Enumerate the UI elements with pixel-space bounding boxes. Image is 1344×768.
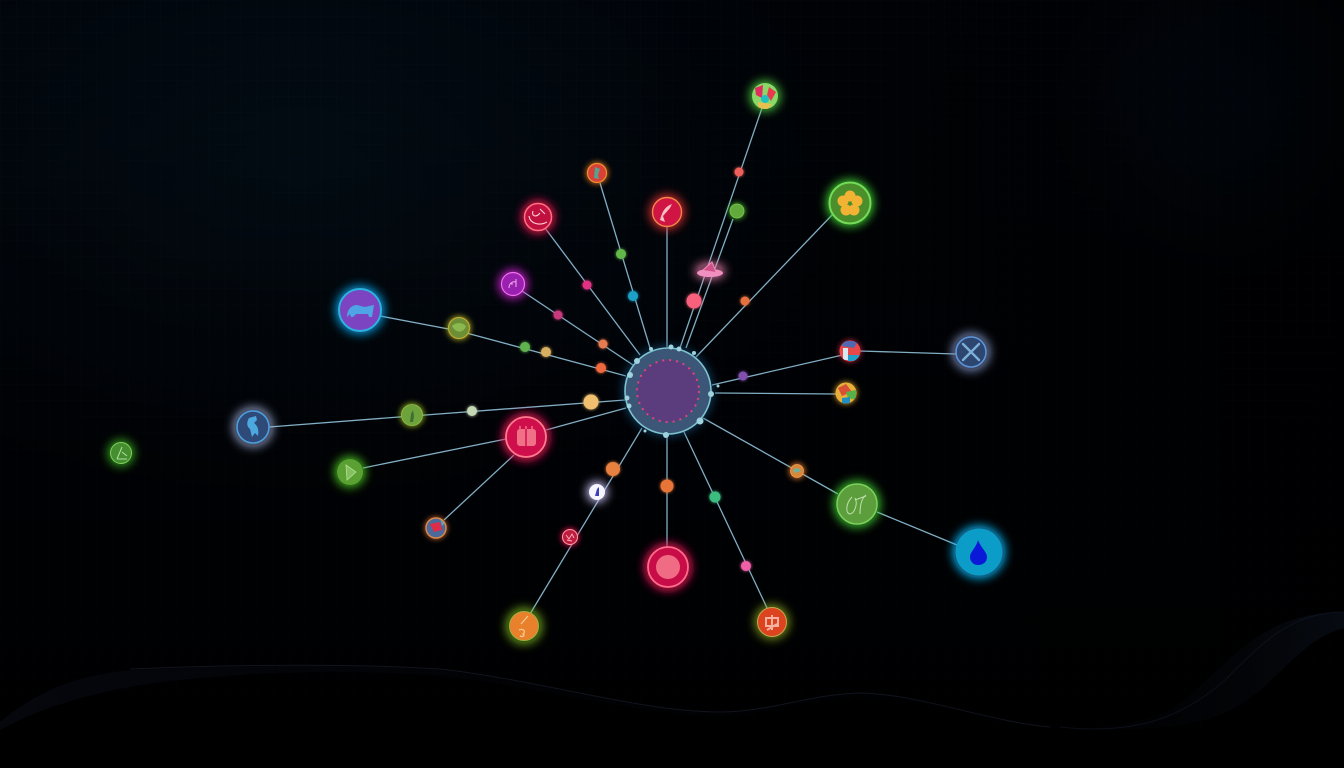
node: green flower [827, 180, 873, 226]
node: crimson quill [650, 195, 684, 229]
node: purple small [499, 270, 527, 298]
node: slate runner [233, 407, 273, 447]
node: orange figure [506, 608, 542, 644]
node: mosaic right upper [839, 340, 861, 362]
central hub [623, 344, 720, 438]
node: red stamp [755, 605, 789, 639]
node: cyan water drop [953, 526, 1005, 578]
node: green small top [729, 203, 745, 219]
node: crimson ring [645, 544, 691, 590]
node: crimson bowl [522, 201, 554, 233]
node: mosaic right lower [835, 382, 857, 404]
node: green arrow [335, 457, 365, 487]
node: orange red top [586, 162, 608, 184]
node: pink brain [561, 528, 579, 546]
node: green far left [108, 440, 134, 466]
node: orange small right [789, 463, 805, 479]
node: slate cutlery [952, 333, 990, 371]
node: white small [587, 482, 607, 502]
node: crimson gift [503, 414, 549, 460]
decorative wave right [1020, 612, 1344, 729]
connector lines [269, 108, 957, 614]
node: green script [834, 481, 880, 527]
small dots on connectors [467, 168, 751, 571]
node: mosaic top [750, 81, 780, 111]
icon: pink saucer [695, 262, 725, 279]
node: green figure [400, 403, 424, 427]
decorative wave left [0, 665, 1060, 730]
node: purple animal [336, 286, 384, 334]
node: mosaic lower left [425, 517, 447, 539]
node: olive leaf [447, 316, 471, 340]
